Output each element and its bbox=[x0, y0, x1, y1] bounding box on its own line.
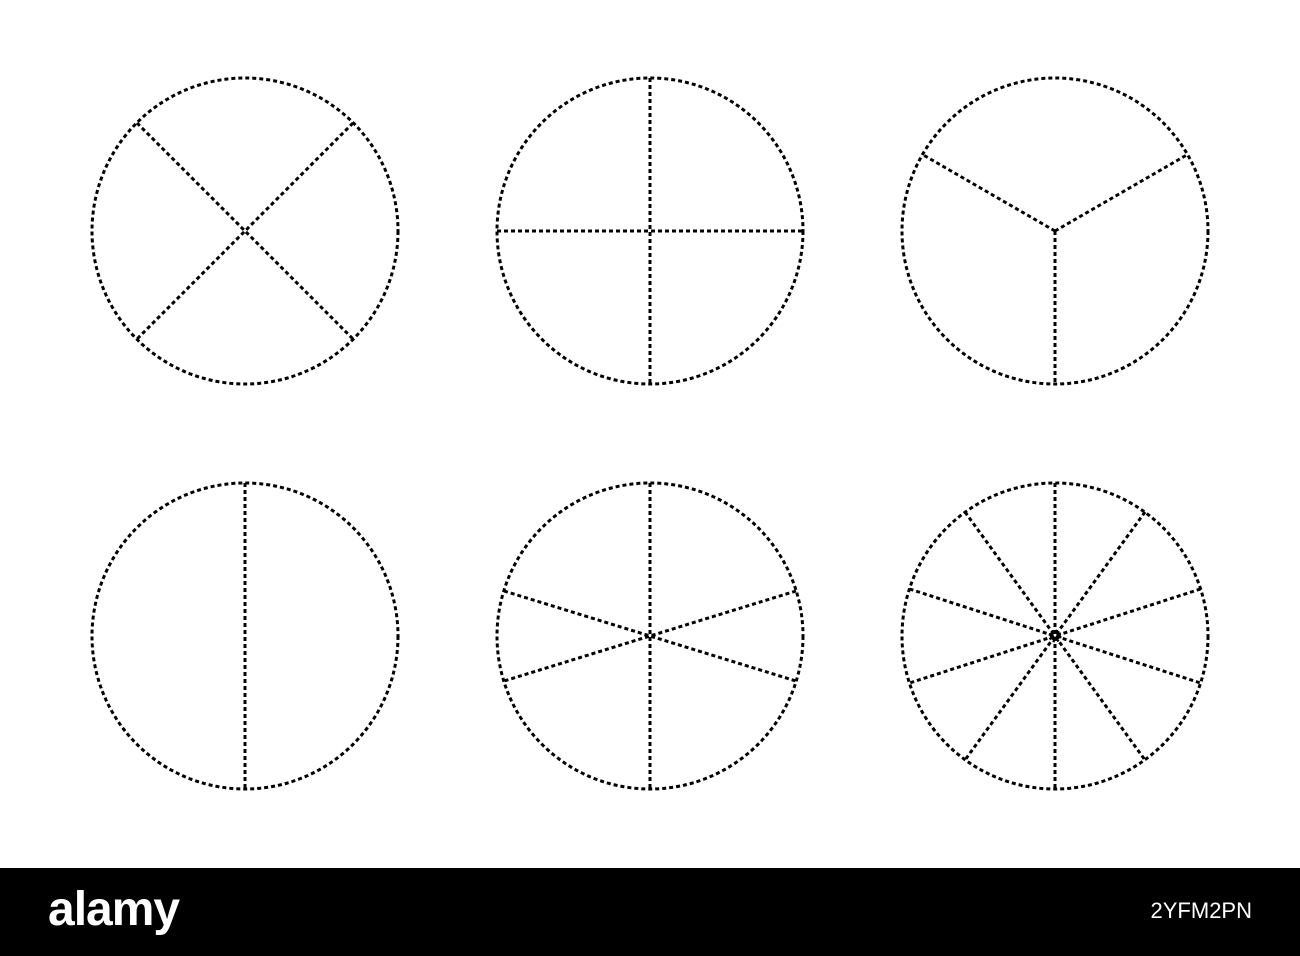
footer bar bbox=[0, 868, 1300, 956]
logo text: alamy bbox=[48, 883, 179, 936]
circle: sixths bbox=[497, 483, 803, 789]
circle: quarters diagonal bbox=[92, 78, 398, 384]
circle: tenths bbox=[902, 483, 1208, 789]
image id: 2YFM2PN bbox=[1151, 898, 1252, 923]
circle: halves bbox=[92, 483, 398, 789]
circle: thirds bbox=[902, 78, 1208, 384]
circle: quarters cross bbox=[497, 78, 803, 384]
